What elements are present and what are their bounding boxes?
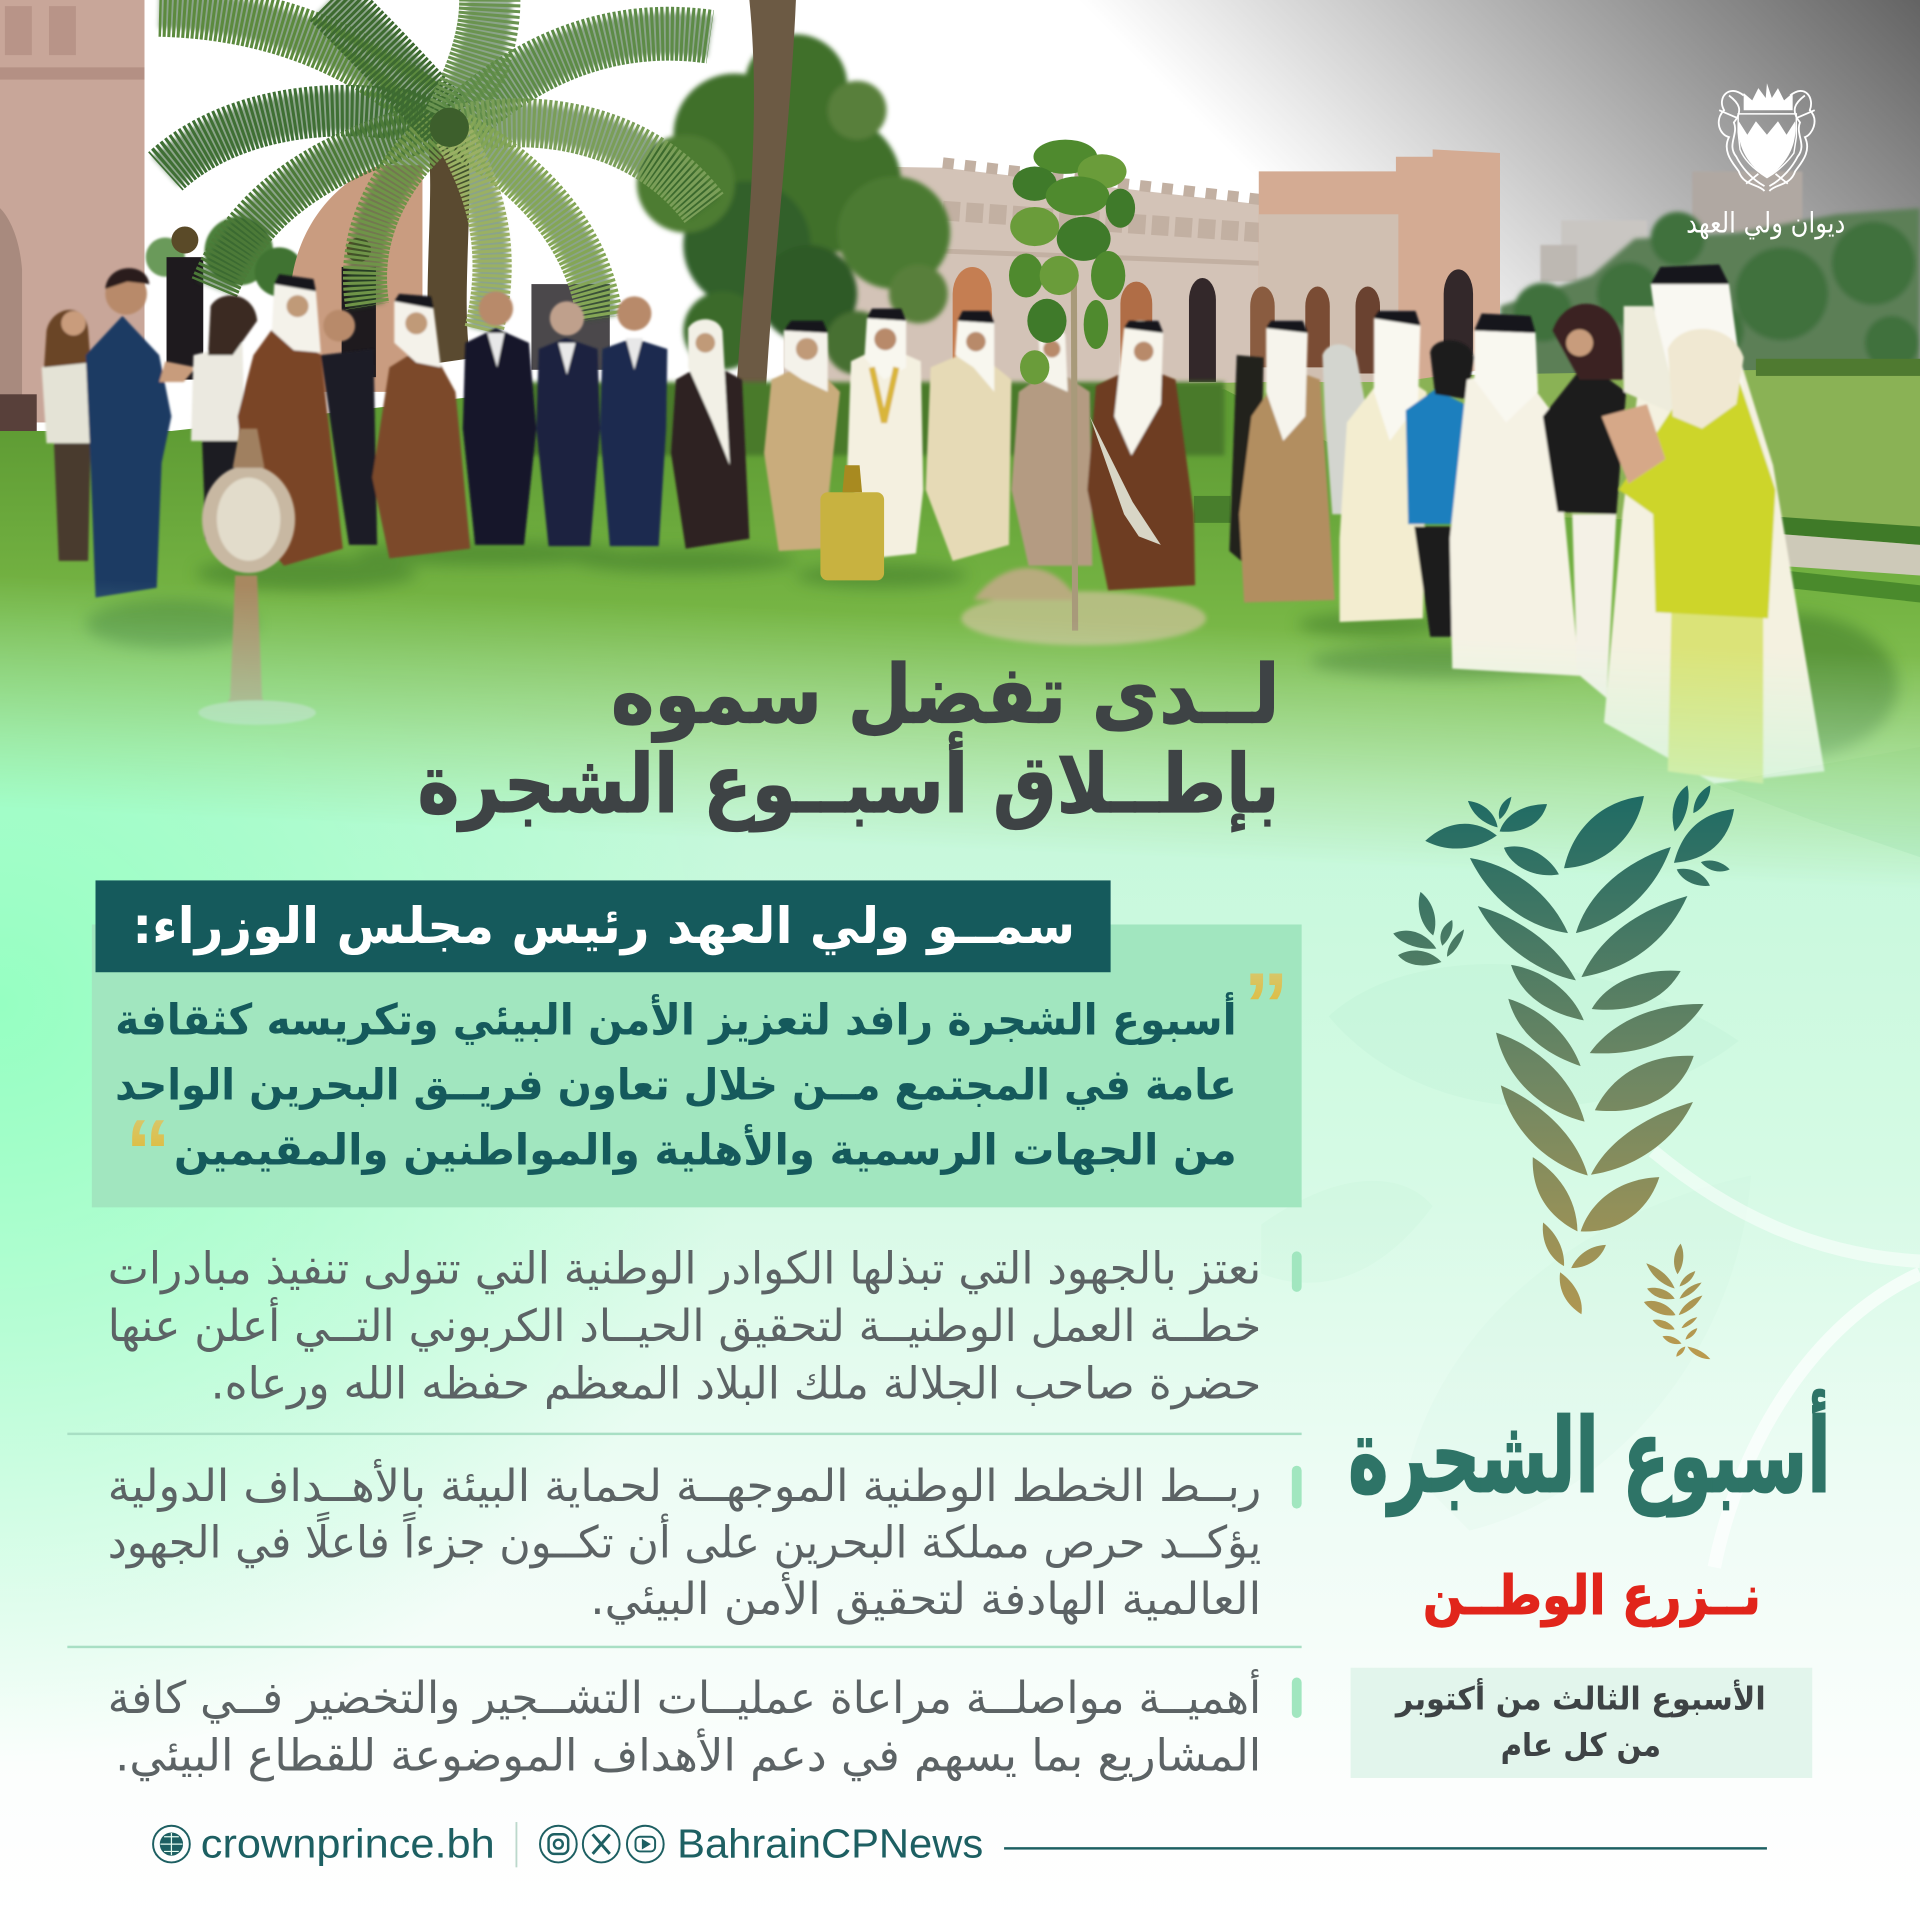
- key point 2: العالمية الهادفة لتحقيق الأمن البيئي.: [590, 1571, 1261, 1625]
- date box: [1351, 1668, 1812, 1778]
- main title: بإطــلاق أسبــوع الشجرة: [418, 731, 1280, 832]
- gate and dark iron fence: [167, 227, 610, 380]
- main title: لــدى تفضل سموه: [611, 648, 1280, 742]
- footer divider: [516, 1822, 517, 1867]
- garden lamp post: [198, 429, 316, 725]
- key point 1: نعتز بالجهود التي تبذلها الكوادر الوطنية التي تتولى تنفيذ مبادرات: [108, 1243, 1261, 1294]
- sapling being planted: [1009, 140, 1135, 631]
- shaded hedge behind guests: [527, 382, 1224, 456]
- person 20: [1406, 340, 1474, 637]
- person 11: [764, 321, 840, 551]
- person 3: [191, 295, 257, 539]
- main title: [418, 648, 1280, 832]
- event photograph: officials planting a tree: [0, 0, 1920, 874]
- quote panel: [92, 880, 1302, 1207]
- tree week logo: leaf branch: [1393, 785, 1734, 1359]
- quote panel background: [92, 924, 1302, 1207]
- main lawn: [0, 390, 1920, 874]
- speaker header bar: [96, 880, 1111, 972]
- person 21: [1450, 313, 1580, 676]
- key point 3: المشاريع بما يسهم في دعم الأهداف الموضوعة للقطاع البيئي.: [115, 1728, 1261, 1782]
- divider 1: [67, 1433, 1302, 1435]
- wall segment: [1259, 214, 1398, 382]
- person 22: [1543, 304, 1626, 698]
- person 4: [238, 274, 343, 566]
- ground shadows: [86, 541, 1898, 759]
- website address: crownprince.bh: [201, 1821, 495, 1867]
- key point 2: يؤكــد حرص مملكة البحرين على أن تكــون جزءاً فاعلًا في الجهود: [108, 1511, 1261, 1569]
- tall palm trunk: [737, 0, 796, 386]
- sky with grey corner gradient: [36, 0, 1920, 431]
- faint background leaf pattern: [1261, 747, 1920, 1567]
- person 6: [372, 294, 470, 558]
- footer: [153, 1821, 1767, 1867]
- icon: instagram: [540, 1826, 577, 1862]
- person 23: [1604, 264, 1824, 784]
- person 13: [926, 311, 1011, 561]
- mantling and crown: [1719, 91, 1815, 191]
- bullet bar: [1292, 1466, 1302, 1509]
- opening quote mark: ”: [1243, 955, 1289, 1056]
- quote text: أسبوع الشجرة رافد لتعزيز الأمن البيئي وتكريسه كثقافة: [115, 992, 1237, 1046]
- quote text: عامة في المجتمع مــن خلال تعاون فريــق البحرين الواحد: [115, 1061, 1237, 1111]
- Bahrain crown prince court emblem: [1686, 83, 1845, 240]
- speaker header bar: سمــو ولي العهد رئيس مجلس الوزراء:: [132, 896, 1075, 956]
- distant buildings right: [1540, 171, 1802, 282]
- shield: [1738, 114, 1796, 178]
- leafy green tree: [637, 34, 950, 375]
- people: [42, 264, 1824, 784]
- quote text: من الجهات الرسمية والأهلية والمواطنين والمقيمين: [174, 1123, 1237, 1175]
- bullet bar: [1292, 1678, 1302, 1718]
- left trees behind gate: [146, 217, 304, 296]
- person 16: [1229, 355, 1264, 563]
- slogan: نــزرع الوطــن: [1423, 1564, 1761, 1627]
- court name: ديوان ولي العهد: [1686, 207, 1845, 240]
- lawn right: [1176, 367, 1920, 539]
- palace arches: [953, 267, 1473, 382]
- main palace wall: [784, 165, 1261, 392]
- person 14: [1011, 327, 1092, 566]
- icon: globe: [153, 1826, 190, 1862]
- key point 3: [108, 1669, 1302, 1782]
- quote text: [115, 992, 1237, 1175]
- golden shovel: [1090, 416, 1161, 545]
- person 7: [463, 291, 536, 545]
- person 9: [600, 296, 667, 546]
- person 2: [86, 268, 196, 598]
- footer rule: [1004, 1847, 1767, 1850]
- date palm left: [159, 0, 710, 361]
- person 1: [42, 310, 93, 561]
- key point 1: حضرة صاحب الجلالة ملك البلاد المعظم حفظه الله ورعاه.: [211, 1358, 1261, 1409]
- bullet bar: [1292, 1251, 1302, 1292]
- key point 1: [108, 1243, 1302, 1409]
- person 10: [671, 319, 749, 549]
- hedges and path at right: [1194, 359, 1920, 602]
- crenellated wall band: [942, 157, 1259, 266]
- arched entrance building: [290, 165, 422, 392]
- closing quote mark: “: [126, 1102, 171, 1203]
- date box: من كل عام: [1501, 1726, 1661, 1764]
- date box: الأسبوع الثالث من أكتوبر: [1394, 1677, 1766, 1717]
- person 12: [847, 309, 923, 558]
- person 8: [536, 301, 600, 546]
- key point 2: ربــط الخطط الوطنية الموجهــة لحماية البيئة بالأهــداف الدولية: [108, 1458, 1261, 1512]
- left stone tower: [0, 0, 144, 431]
- key point 1: خطــة العمل الوطنيــة لتحقيق الحيــاد الكربوني التــي أعلن عنها: [108, 1297, 1261, 1352]
- divider 2: [67, 1646, 1302, 1648]
- person 18: [1322, 344, 1365, 514]
- person 17: [1239, 321, 1335, 602]
- dirt mound: [961, 568, 1206, 645]
- person 15: [1087, 320, 1195, 590]
- person 5: [321, 310, 377, 545]
- icon: youtube: [627, 1826, 664, 1862]
- distant trees right: [1500, 208, 1920, 380]
- golden water stand: [820, 465, 884, 580]
- person 19: [1340, 311, 1427, 622]
- person 24: [1602, 329, 1776, 784]
- social handle: BahrainCPNews: [677, 1821, 983, 1867]
- key point 2: [108, 1458, 1302, 1625]
- palace tower: [1259, 149, 1500, 382]
- key point 3: أهميــة مواصلــة مراعاة عمليــات التشــجير والتخضير فــي كافة: [108, 1669, 1261, 1724]
- icon: X: [583, 1826, 620, 1862]
